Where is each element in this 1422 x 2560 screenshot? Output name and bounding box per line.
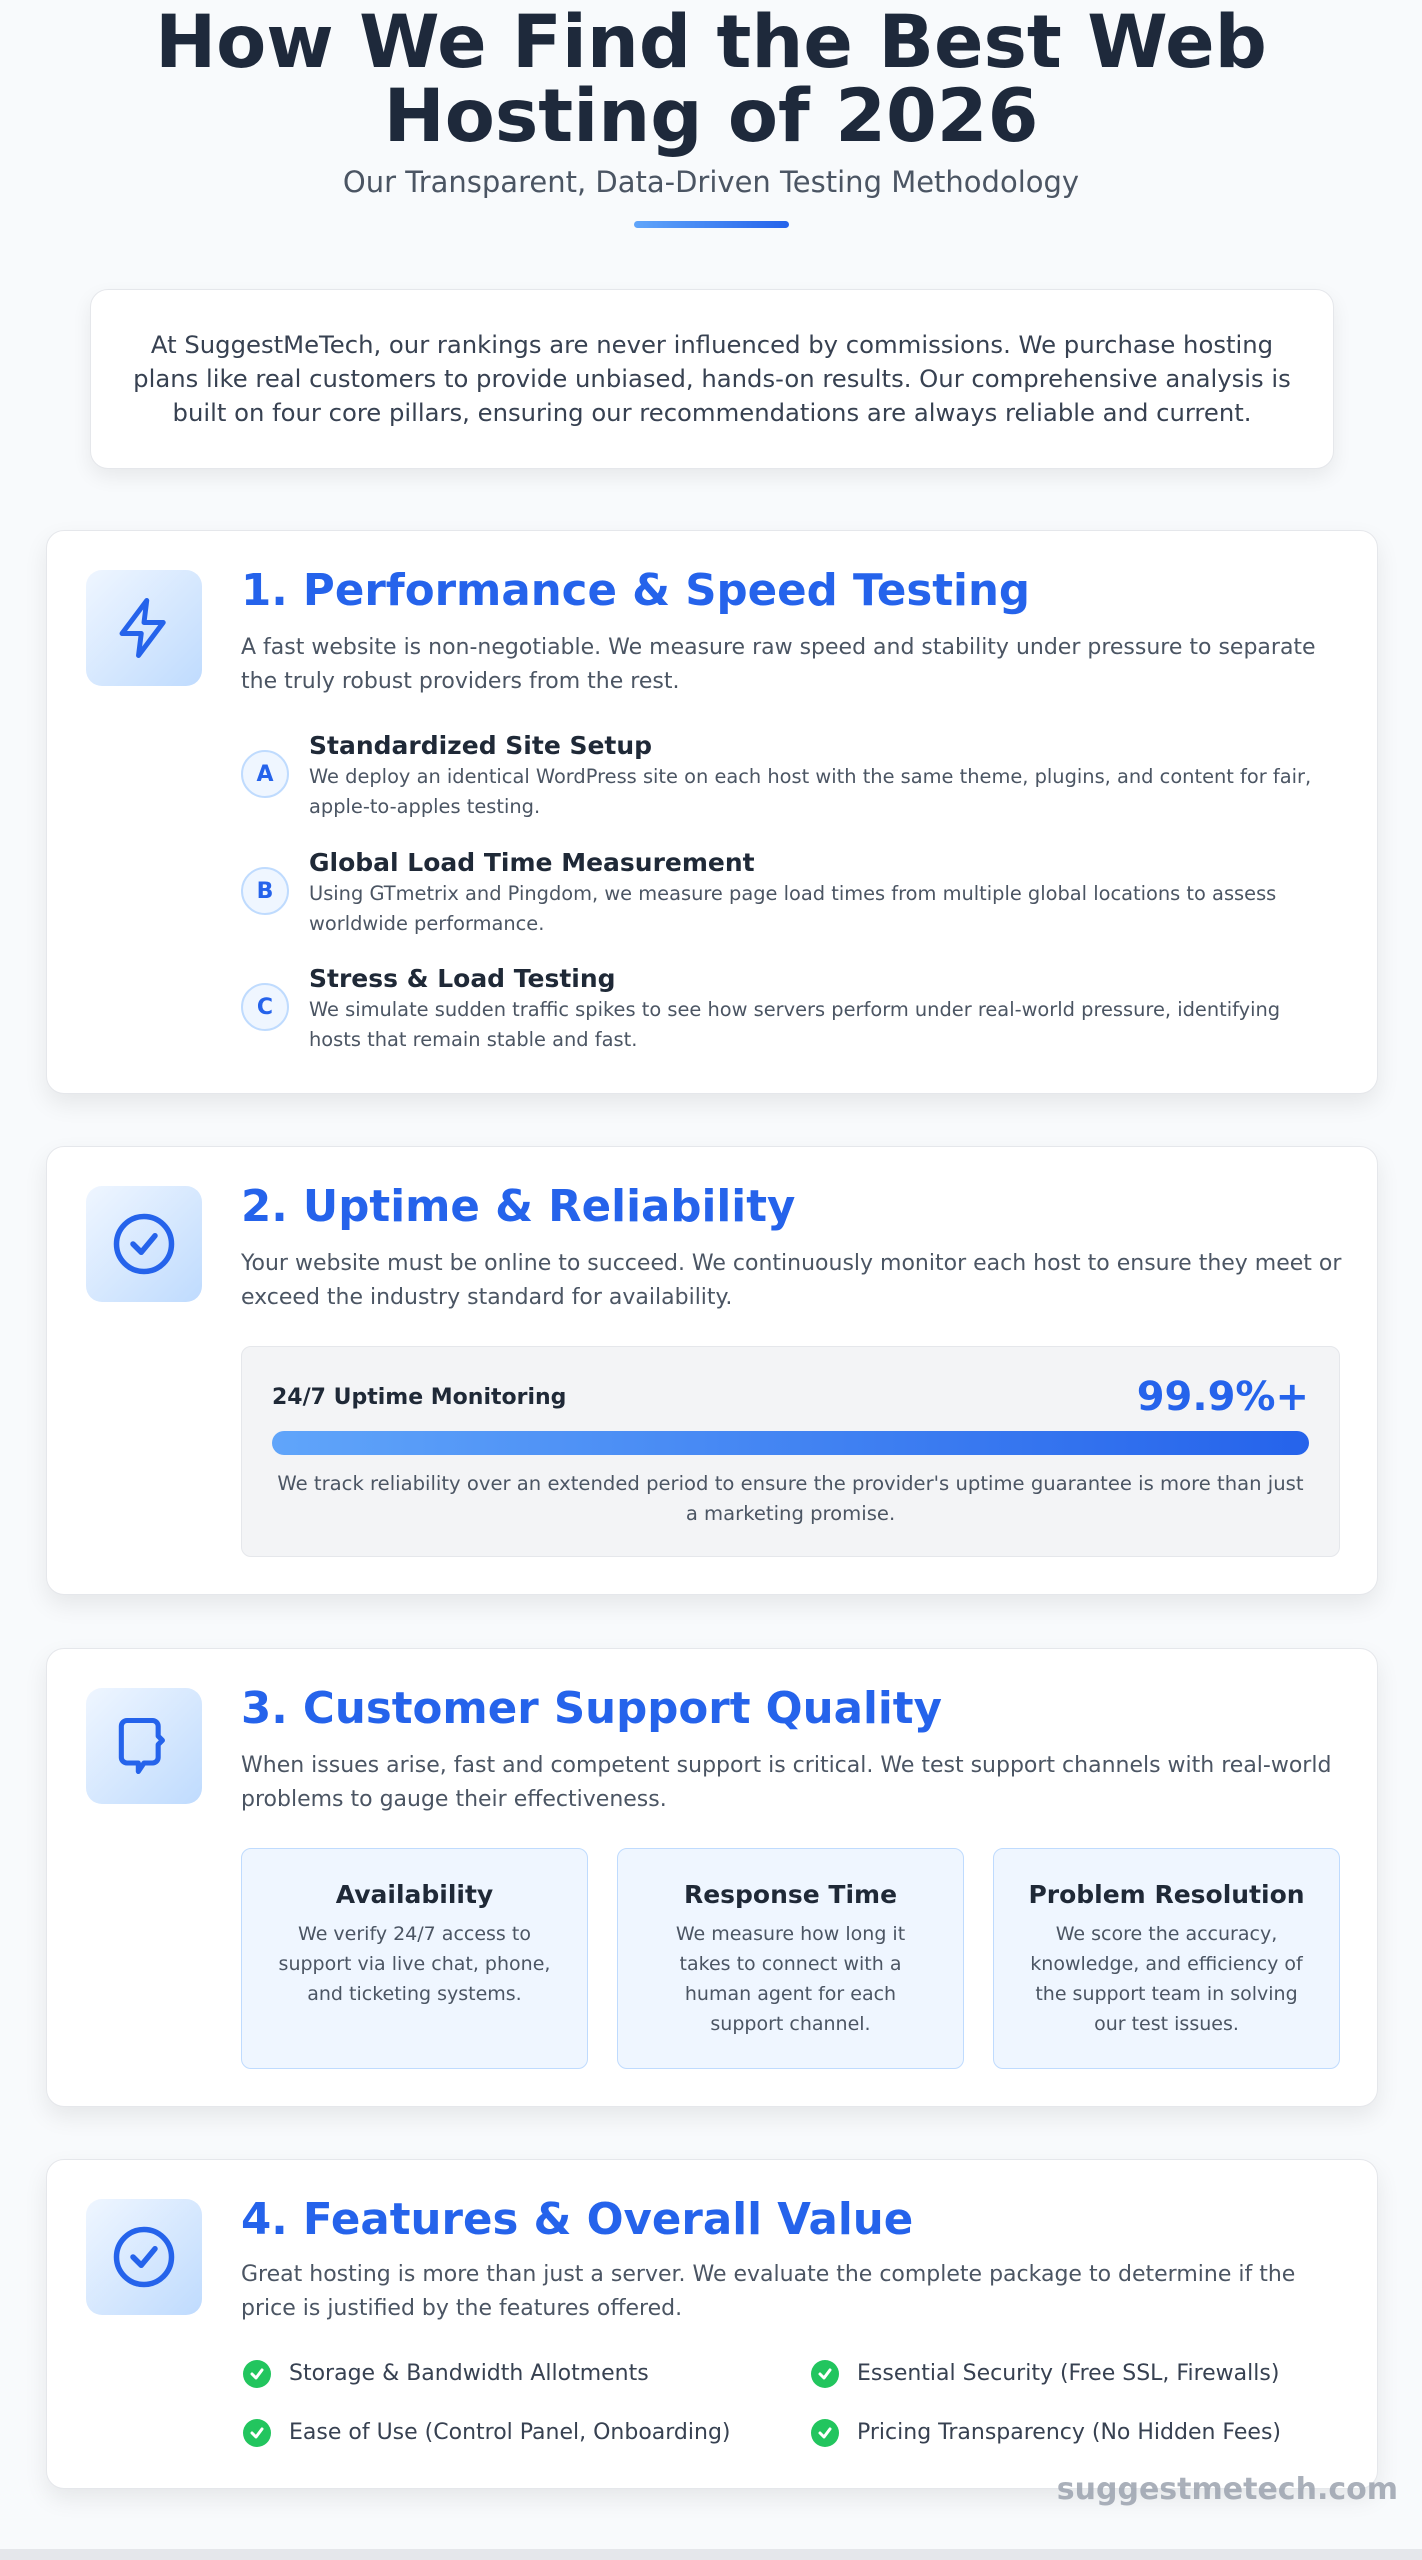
- panel: support: [46, 1648, 1378, 2107]
- note: We track reliability over an extended period to ensure the provider's uptime guarantee is more than just a marketing promise.: [277, 1472, 1304, 1525]
- feature 4: Pricing Transparency (No Hidden Fees): [857, 2420, 1281, 2445]
- feature 1: Storage & Bandwidth Allotments: [289, 2361, 649, 2386]
- item B: Global Load Time Measurement: [309, 848, 755, 877]
- box: availability: We verify 24/7 access to support via live chat, phone, and ticketing systems.: [279, 1923, 550, 2005]
- heading: 1. Performance & Speed Testing: [241, 566, 1030, 616]
- item C: [241, 964, 1280, 1051]
- box: problem resolution: We score the accuracy, knowledge, and efficiency of the support team in solving our test issues.: [1030, 1923, 1303, 2035]
- description: Great hosting is more than just a server. We evaluate the complete package to determine if the price is justified by the features offered.: [241, 2262, 1295, 2321]
- box: problem resolution: Problem Resolution: [1028, 1880, 1305, 1909]
- item A: [241, 731, 1311, 818]
- box: availability: Availability: [336, 1880, 493, 1909]
- item C: Stress & Load Testing: [309, 964, 616, 993]
- item A: A: [256, 762, 274, 786]
- box: response time: We measure how long it takes to connect with a human agent for each support channel.: [676, 1923, 905, 2035]
- heading: 2. Uptime & Reliability: [241, 1182, 795, 1232]
- intro card: At SuggestMeTech, our rankings are never influenced by commissions. We purchase hosting plans like real customers to provide unbiased, hands-on results. Our comprehensive analysis is built on four core pillars, ensuring our recommendations are always reliable and current.: [133, 330, 1291, 427]
- title: [155, 0, 1267, 159]
- panel: performance: [46, 530, 1378, 1094]
- progress bar: [272, 1431, 1309, 1455]
- stat: 99.9%+: [1137, 1374, 1309, 1420]
- box: response time: [617, 1848, 964, 2069]
- accent bar: [634, 221, 789, 228]
- subtitle: Our Transparent, Data-Driven Testing Methodology: [343, 165, 1079, 199]
- description: When issues arise, fast and competent support is critical. We test support channels with real‑world problems to gauge their effectiveness.: [241, 1753, 1331, 1812]
- box: response time: Response Time: [684, 1880, 897, 1909]
- title: Hosting of 2026: [384, 74, 1038, 159]
- item B: [241, 848, 1276, 935]
- item A: Standardized Site Setup: [309, 731, 652, 760]
- label: 24/7 Uptime Monitoring: [272, 1385, 566, 1410]
- feature 2: Essential Security (Free SSL, Firewalls): [857, 2361, 1279, 2386]
- item C: We simulate sudden traffic spikes to see how servers perform under real-world pressure, identifying hosts that remain stable and fast.: [309, 998, 1280, 1051]
- icon: chat: [86, 1688, 202, 1804]
- bottom strip: [0, 2549, 1422, 2560]
- heading: 3. Customer Support Quality: [241, 1684, 942, 1734]
- panel: features: [46, 2159, 1378, 2489]
- box: availability: [241, 1848, 588, 2069]
- uptime box: [241, 1346, 1340, 1557]
- description: A fast website is non-negotiable. We measure raw speed and stability under pressure to separate the truly robust providers from the rest.: [241, 635, 1316, 694]
- item B: Using GTmetrix and Pingdom, we measure page load times from multiple global locations to assess worldwide performance.: [309, 882, 1276, 935]
- item A: We deploy an identical WordPress site on each host with the same theme, plugins, and content for fair, apple-to-apples testing.: [309, 765, 1311, 818]
- item C: C: [257, 994, 273, 1020]
- watermark: suggestmetech.com: [1057, 2472, 1398, 2507]
- box: problem resolution: [993, 1848, 1340, 2069]
- panel: uptime: [46, 1146, 1378, 1595]
- title: How We Find the Best Web: [155, 0, 1267, 85]
- icon: check circle: [86, 2199, 202, 2315]
- icon: check circle: [86, 1186, 202, 1302]
- description: Your website must be online to succeed. We continuously monitor each host to ensure they meet or exceed the industry standard for availability.: [241, 1251, 1341, 1310]
- feature 3: Ease of Use (Control Panel, Onboarding): [289, 2420, 730, 2445]
- heading: 4. Features & Overall Value: [241, 2195, 913, 2245]
- item B: B: [257, 878, 273, 904]
- icon: lightning: [86, 570, 202, 686]
- intro card: [90, 289, 1334, 469]
